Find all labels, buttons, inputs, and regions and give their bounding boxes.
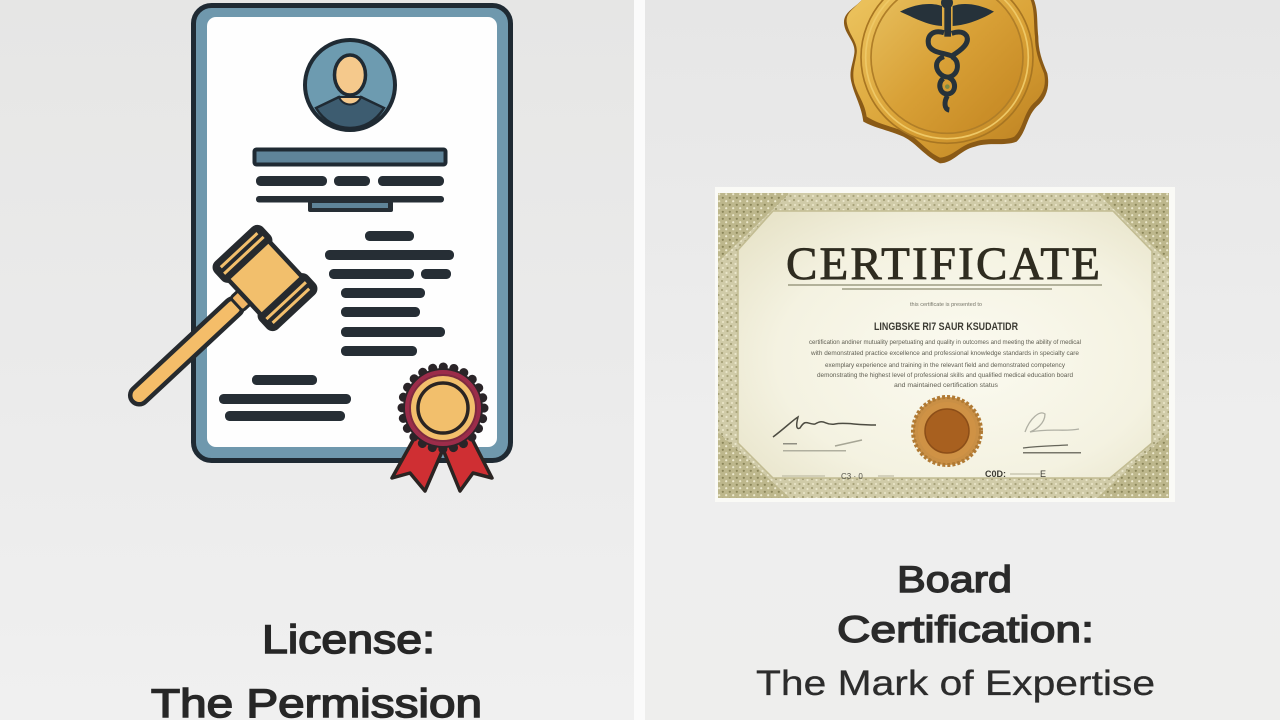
- certificate footer marks: C0D:: [985, 469, 1006, 479]
- icon: gold wax seal with caduceus: [844, 0, 1048, 163]
- icon: award rosette with ribbon: [392, 367, 492, 491]
- certificate body text: [809, 340, 1081, 389]
- icon: profile avatar: [305, 40, 395, 130]
- heading: certification: Certification:: [837, 609, 1094, 650]
- certificate seal: [913, 397, 981, 465]
- left signature: [773, 417, 876, 452]
- subheading: the mark of expertise: The Mark of Expertise: [756, 664, 1155, 703]
- certificate body text: with demonstrated practice excellence and professional knowledge standards in specialty care: [810, 351, 1080, 357]
- panel: board certification background: [645, 0, 1280, 720]
- caduceus symbol: [900, 0, 994, 110]
- ribbon tails: [392, 435, 492, 491]
- document text lines: [219, 176, 454, 421]
- title rule: [788, 285, 1102, 289]
- document title bar: [254, 150, 446, 164]
- certificate body text: demonstrating the highest level of professional skills and qualified medical education board: [817, 373, 1073, 379]
- certificate body text: exemplary experience and training in the relevant field and demonstrated competency: [825, 363, 1065, 369]
- certificate footer marks: [782, 469, 1046, 481]
- certificate paper: [738, 211, 1152, 478]
- heading: license: License:: [262, 618, 435, 662]
- certificate footer marks: C3 · 0: [841, 472, 863, 481]
- certificate small caption: this certificate is presented to: [910, 302, 982, 308]
- right signature: [1023, 413, 1081, 454]
- heading: board: Board: [897, 559, 1012, 600]
- recipient name: LINGBSKE RI7 SAUR KSUDATIDR: [874, 321, 1018, 333]
- certificate outer frame: [715, 187, 1175, 502]
- panel: license background: [0, 0, 634, 720]
- icon: gavel: [103, 225, 318, 434]
- scalloped rosette: [402, 367, 484, 449]
- certificate title: CERTIFICATE: [786, 238, 1100, 290]
- certificate body text: and maintained certification status: [894, 383, 998, 389]
- icon: license document: [194, 6, 510, 460]
- ornamental border: [718, 193, 1169, 498]
- certificate footer marks: E: [1040, 469, 1046, 479]
- certificate: [715, 187, 1175, 502]
- certificate body text: certification andiner mutuality perpetuating and quality in outcomes and meeting the ability of medical: [809, 340, 1081, 346]
